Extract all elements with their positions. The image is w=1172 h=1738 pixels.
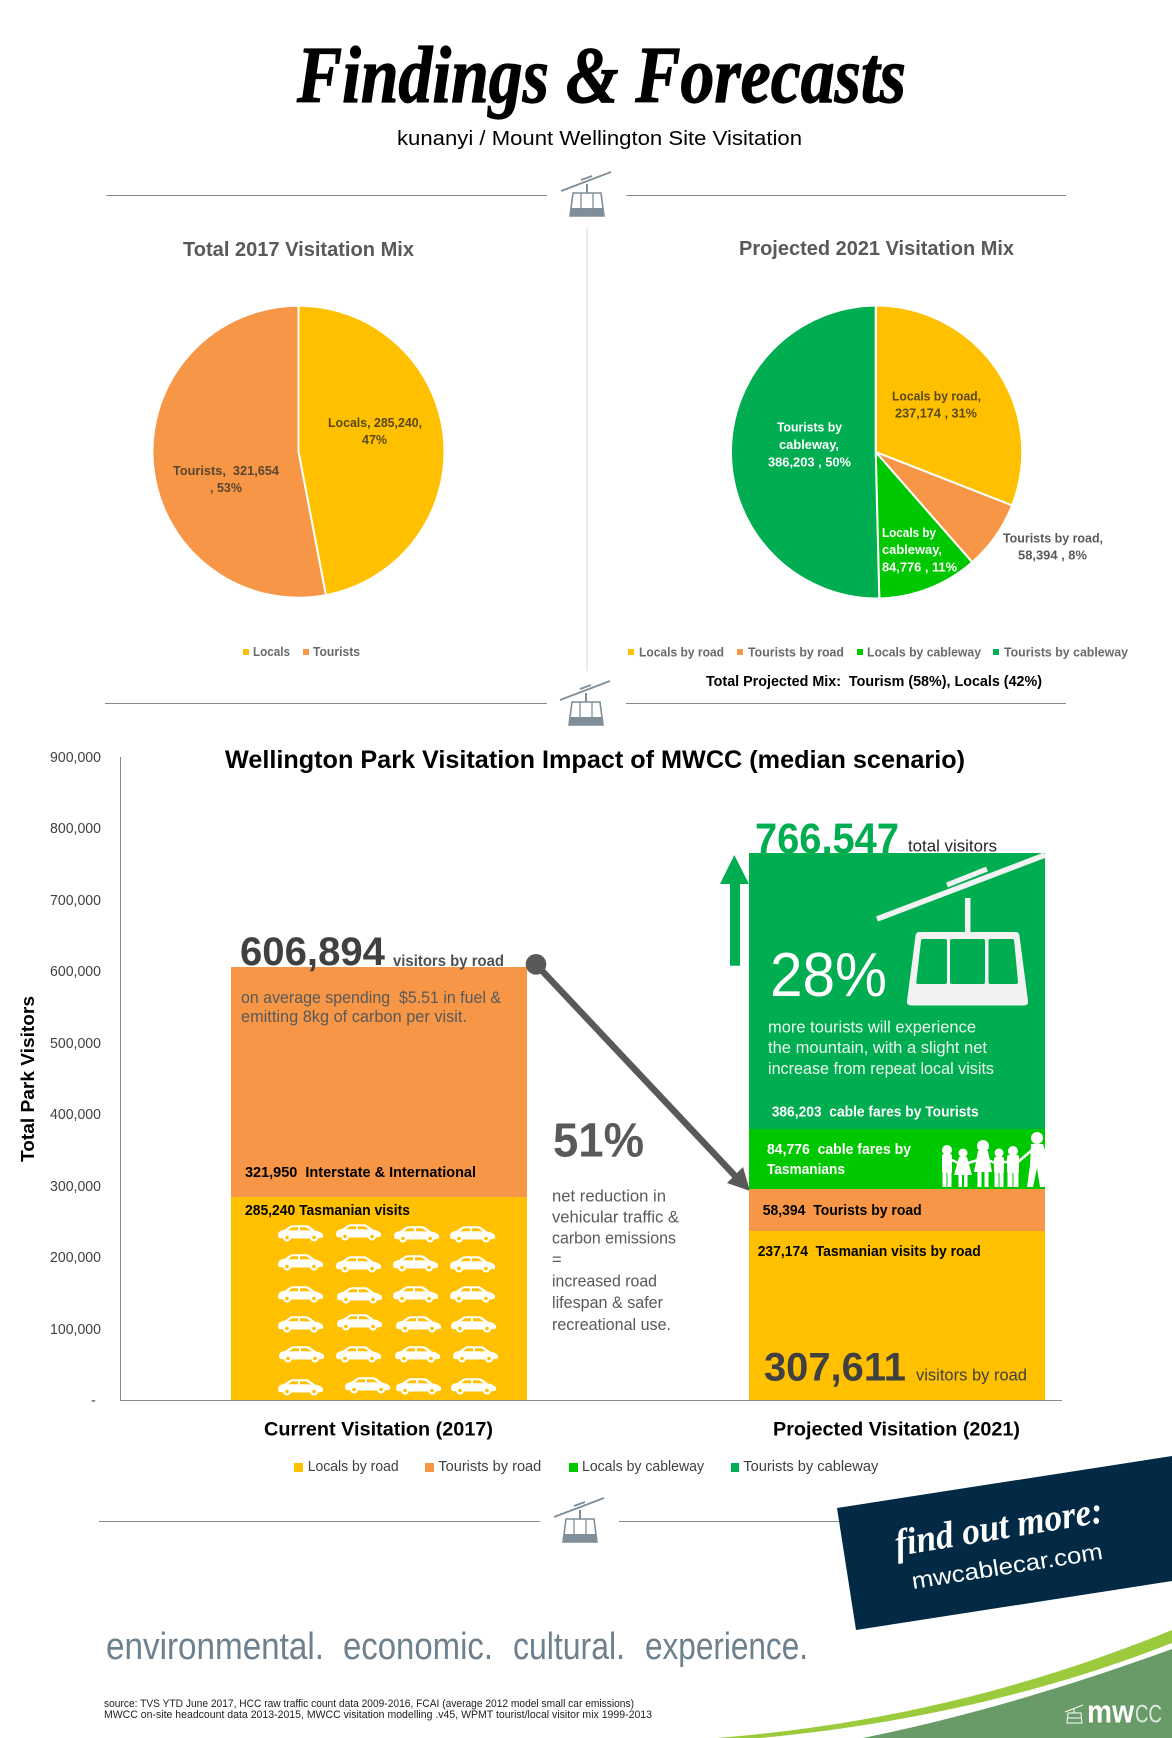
label: cable fares tasmanians: 84,776 cable fares by	[767, 1142, 911, 1158]
label: locals by cableway: cableway,	[882, 542, 942, 557]
label: tourists by cableway	[768, 420, 851, 470]
pie chart: 2017	[152, 306, 444, 598]
stat: 51%: 51%	[553, 1115, 644, 1168]
title: Findings & Forecasts	[296, 32, 906, 120]
label: tourists by road: Tourists by road,	[1003, 531, 1103, 546]
text: net reduction: vehicular traffic &	[552, 1209, 679, 1227]
panel: stacked bar chart	[18, 746, 1062, 1475]
tagline: experience.	[645, 1626, 808, 1668]
icon: cable car divider middle	[105, 681, 1066, 725]
label: cable fares tasmanians	[767, 1142, 911, 1178]
label: tasmanian visits by road: 237,174 Tasmanian visits by road	[758, 1244, 981, 1260]
arrow: reduction	[526, 954, 750, 1191]
source note	[104, 1698, 652, 1721]
logo: mwcc: CC	[1135, 1701, 1162, 1729]
label: cable fares tourists: 386,203 cable fares by Tourists	[772, 1105, 979, 1121]
text: more tourists: the mountain, with a slight net	[768, 1039, 987, 1057]
label: tourists	[173, 463, 280, 495]
stat label: visitors by road	[916, 1366, 1027, 1385]
label: tourists: Tourists, 321,654	[173, 463, 280, 478]
footer swoosh	[717, 1630, 1172, 1738]
label: locals: Locals, 285,240,	[328, 415, 422, 430]
legend: 2021	[628, 645, 1129, 660]
panel: 2017 visitation mix	[152, 239, 444, 659]
heading: 2021 mix: Projected 2021 Visitation Mix	[739, 238, 1014, 260]
tagline: economic.	[343, 1626, 493, 1668]
subtitle: kunanyi / Mount Wellington Site Visitation	[397, 128, 802, 150]
label: tourists by road	[1003, 531, 1103, 562]
y axis labels: 500,000	[50, 1036, 101, 1052]
text: spending: on average spending $5.51 in fuel &	[241, 989, 501, 1007]
label: tourists by cableway: 386,203 , 50%	[768, 455, 851, 470]
legend: 2021: Tourists by cableway	[1004, 645, 1129, 660]
legend: 2021: Tourists by road	[748, 645, 844, 660]
label: tasmanian: 285,240 Tasmanian visits	[245, 1203, 410, 1219]
chart legend: Locals by road	[308, 1459, 399, 1475]
y axis labels: 400,000	[50, 1107, 101, 1123]
text: more tourists: more tourists will experience	[768, 1019, 976, 1037]
heading: 2017 mix: Total 2017 Visitation Mix	[183, 239, 414, 261]
panel: 2021 visitation mix	[628, 238, 1129, 690]
icon: family silhouettes	[942, 1132, 1045, 1187]
y axis labels: 100,000	[50, 1322, 101, 1338]
chart legend: Locals by cableway	[582, 1459, 705, 1475]
text: net reduction: lifespan & safer	[552, 1294, 663, 1312]
label: locals by road: Locals by road,	[892, 389, 981, 404]
tagline	[106, 1626, 808, 1668]
stat label: total visitors: total visitors	[908, 838, 997, 856]
banner url: mwcablecar.com	[910, 1538, 1104, 1594]
label: locals by road: 237,174 , 31%	[895, 406, 977, 421]
axes	[120, 757, 1062, 1400]
legend: 2017: Tourists	[313, 644, 360, 659]
icon: cable car divider top	[106, 172, 1066, 216]
y axis labels: 800,000	[50, 821, 101, 837]
logo: mwcc: mw	[1087, 1694, 1134, 1730]
label: interstate: 321,950 Interstate & International	[245, 1165, 476, 1181]
chart title: Wellington Park Visitation Impact of MWCC (median scenario)	[225, 746, 965, 774]
stat: 606,894: 606,894	[240, 930, 386, 974]
y axis labels: 700,000	[50, 893, 101, 909]
stat: 307,611: 307,611	[764, 1346, 906, 1390]
text: more tourists: increase from repeat local visits	[768, 1060, 994, 1078]
label: locals	[328, 415, 422, 447]
y axis labels: -	[91, 1393, 96, 1409]
legend: 2021: Locals by road	[639, 645, 724, 660]
text: spending: emitting 8kg of carbon per visit.	[241, 1008, 467, 1026]
text: net reduction: =	[552, 1251, 562, 1269]
callout: find out more banner	[837, 1456, 1172, 1630]
callout: total projected mix: Total Projected Mix: Tourism (58%), Locals (42%)	[706, 674, 1042, 690]
x axis labels: Projected Visitation (2021)	[773, 1420, 1020, 1441]
label: tourists: , 53%	[210, 480, 242, 495]
icon: cars	[278, 1224, 498, 1396]
y axis labels: 900,000	[50, 750, 101, 766]
text: net reduction: increased road	[552, 1273, 657, 1291]
label: locals by cableway: Locals by	[882, 525, 937, 540]
label: tourists by cableway: Tourists by	[777, 420, 843, 435]
label: locals by cableway	[882, 525, 957, 575]
chart legend	[294, 1459, 879, 1475]
text: net reduction: carbon emissions	[552, 1230, 676, 1248]
label: tourists by road: 58,394 , 8%	[1018, 547, 1087, 562]
text: net reduction	[552, 1188, 679, 1334]
stat label: visitors by road	[393, 953, 504, 970]
y axis title: Total Park Visitors	[18, 996, 38, 1162]
label: locals: 47%	[362, 432, 387, 447]
label: tourists by road: 58,394 Tourists by road	[763, 1203, 922, 1219]
y axis labels: 200,000	[50, 1250, 101, 1266]
icon: cable car white	[877, 855, 1045, 1006]
text: net reduction: recreational use.	[552, 1316, 671, 1334]
label: tourists by cableway: cableway,	[779, 437, 839, 452]
tagline: cultural.	[513, 1626, 625, 1668]
stat: 28%: 28%	[770, 941, 887, 1010]
label: cable fares tasmanians: Tasmanians	[767, 1162, 845, 1178]
y axis labels: 300,000	[50, 1179, 101, 1195]
icon: cable car divider bottom	[99, 1498, 840, 1542]
bar: current visitation	[231, 930, 527, 1400]
stat: 766,547: 766,547	[755, 815, 899, 863]
legend: 2017: Locals	[253, 644, 290, 659]
arrow: up green	[720, 855, 749, 966]
tagline: environmental.	[106, 1626, 324, 1668]
source note: source: TVS YTD June 2017, HCC raw traffic count data 2009-2016, FCAI (average 2012 model small car emissions)	[104, 1698, 634, 1710]
banner heading: find out more:	[892, 1489, 1106, 1565]
source note: MWCC on-site headcount data 2013-2015, MWCC visitation modelling .v45, WPMT tourist/local visitor mix 1999-2013	[104, 1709, 652, 1721]
y axis labels: 600,000	[50, 964, 101, 980]
label: locals by road	[892, 389, 981, 421]
x axis labels: Current Visitation (2017)	[264, 1420, 493, 1441]
label: locals by cableway: 84,776 , 11%	[882, 560, 957, 575]
legend: 2021: Locals by cableway	[867, 645, 982, 660]
chart legend: Tourists by cableway	[743, 1459, 879, 1475]
text: net reduction: net reduction in	[552, 1188, 666, 1206]
x axis labels	[264, 1420, 1020, 1441]
pie chart: 2021	[731, 306, 1022, 599]
y axis labels	[50, 750, 101, 1409]
bar: projected visitation	[749, 853, 1045, 1400]
logo: mwcc	[1065, 1694, 1162, 1730]
text: more tourists	[768, 1019, 994, 1078]
chart legend: Tourists by road	[438, 1459, 541, 1475]
legend: 2017	[243, 644, 360, 659]
text: spending	[241, 989, 501, 1026]
